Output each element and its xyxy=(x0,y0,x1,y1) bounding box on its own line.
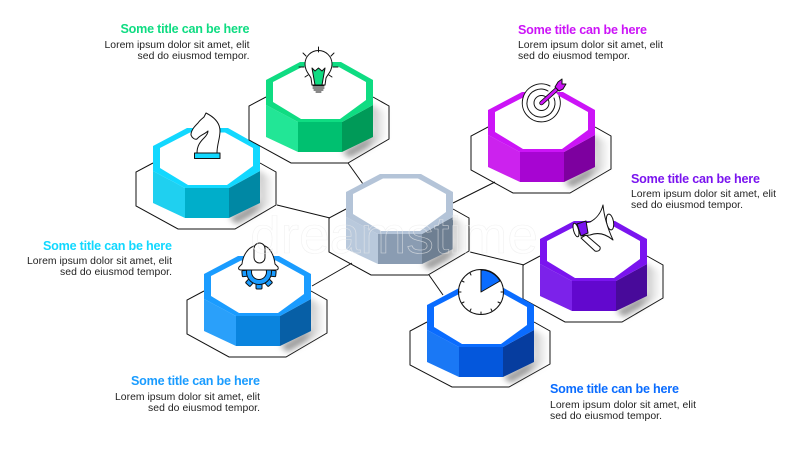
text block: violet: Lorem ipsum dolor sit amet, elit xyxy=(631,189,776,200)
watermark: dreamstime xyxy=(250,207,538,265)
text block: cyan: sed do eiusmod tempor. xyxy=(60,267,172,278)
text block: green: Some title can be here xyxy=(120,22,250,36)
text block: violet: Some title can be here xyxy=(631,172,760,186)
connector lines between blocks xyxy=(277,163,524,295)
text block: magenta: Lorem ipsum dolor sit amet, elit xyxy=(518,40,663,51)
text block: dark blue: sed do eiusmod tempor. xyxy=(550,411,662,422)
text block: dark blue xyxy=(550,382,696,422)
text block: light blue xyxy=(115,374,260,414)
icon: chess knight xyxy=(191,113,220,158)
text block: dark blue: Lorem ipsum dolor sit amet, elit xyxy=(550,400,696,411)
icon: light bulb xyxy=(299,47,338,92)
text block: magenta xyxy=(518,23,663,62)
text block: light blue: sed do eiusmod tempor. xyxy=(148,403,260,414)
text block: magenta: Some title can be here xyxy=(518,23,647,37)
text block: cyan: Some title can be here xyxy=(43,239,172,253)
icon: target with arrow xyxy=(522,79,566,122)
text block: cyan: Lorem ipsum dolor sit amet, elit xyxy=(27,256,172,267)
block: violet (megaphone) xyxy=(523,221,663,322)
block: grey centre xyxy=(329,174,469,275)
block: dark blue (time) xyxy=(410,287,550,387)
text block: violet: sed do eiusmod tempor. xyxy=(631,200,743,211)
icon: clock xyxy=(458,270,504,314)
text block: green: Lorem ipsum dolor sit amet, elit xyxy=(104,40,250,51)
text block: cyan xyxy=(27,239,172,278)
block: magenta (target) xyxy=(471,92,611,193)
text block: light blue: Lorem ipsum dolor sit amet, elit xyxy=(115,392,260,403)
text block: green: sed do eiusmod tempor. xyxy=(138,51,250,62)
icon: hard hat and gear xyxy=(239,243,278,289)
text block: dark blue: Some title can be here xyxy=(550,382,679,396)
block: green (idea) xyxy=(249,62,389,163)
text block: green xyxy=(104,22,250,62)
block: cyan (chess) xyxy=(136,128,276,229)
text block: violet xyxy=(631,172,776,211)
text block: magenta: sed do eiusmod tempor. xyxy=(518,51,630,62)
icon: megaphone xyxy=(572,205,615,251)
text block: light blue: Some title can be here xyxy=(131,374,260,388)
block: light blue (engineering) xyxy=(187,256,327,357)
